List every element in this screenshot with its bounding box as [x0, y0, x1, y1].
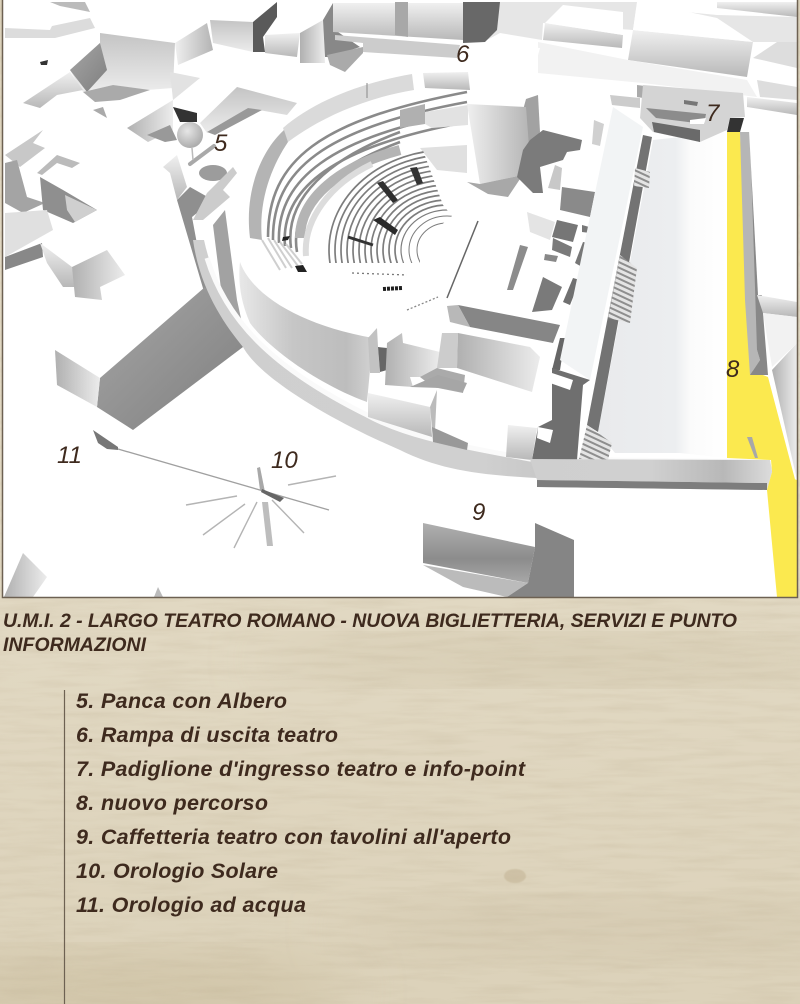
map frame [2, 0, 798, 598]
legend vertical rule [64, 690, 66, 1004]
legend list: 7. Padiglione d'ingresso teatro e info-point [76, 757, 526, 781]
perimeter wall and inner shade [193, 167, 772, 490]
stage buildings, east of the theatre [447, 120, 604, 460]
wall end over the path [530, 459, 772, 483]
buildings in front of the drum [368, 328, 540, 450]
legend list: 10. Orologio Solare [76, 859, 278, 883]
number labels on the map: 7 [706, 100, 721, 127]
legend list: 9. Caffetteria teatro con tavolini all'aperto [76, 825, 511, 849]
surrounding buildings, north [300, 2, 797, 155]
upper cavea seating [249, 72, 470, 272]
pavilion, item 7 [640, 85, 745, 142]
map panel: 3D model of the Roman theatre [3, 0, 797, 597]
legend list: 8. nuovo percorso [76, 791, 268, 815]
plaza along the east side [560, 107, 686, 460]
number labels on the map: 11 [57, 442, 82, 469]
surrounding buildings, north-west [5, 2, 300, 300]
water clock, item 11 [93, 430, 329, 510]
heading: INFORMAZIONI [3, 634, 147, 656]
theatre drum [239, 262, 373, 402]
legend list [76, 689, 526, 917]
fragments, south edge [4, 553, 163, 597]
legend list: 11. Orologio ad acqua [76, 893, 306, 917]
sundial, item 10 [186, 467, 336, 548]
large building, west [55, 287, 243, 430]
café building, item 9 [423, 523, 574, 597]
heading: U.M.I. 2 - LARGO TEATRO ROMANO - NUOVA BIGLIETTERIA, SERVIZI E PUNTO [3, 610, 737, 632]
number labels on the map [57, 41, 740, 526]
heading [3, 610, 737, 656]
buildings east of the path [740, 112, 797, 480]
legend list: 6. Rampa di uscita teatro [76, 723, 338, 747]
number labels on the map: 10 [271, 447, 298, 474]
tall central building [467, 43, 540, 197]
number labels on the map: 5 [214, 130, 228, 157]
theatre rim [239, 65, 470, 338]
legend list: 5. Panca con Albero [76, 689, 287, 713]
new path, item 8, in yellow [727, 132, 797, 597]
number labels on the map: 9 [472, 499, 485, 526]
lower cavea seating [328, 145, 479, 311]
number labels on the map: 8 [726, 356, 740, 383]
number labels on the map: 6 [456, 41, 470, 68]
bench and tree, item 5 [177, 122, 227, 181]
